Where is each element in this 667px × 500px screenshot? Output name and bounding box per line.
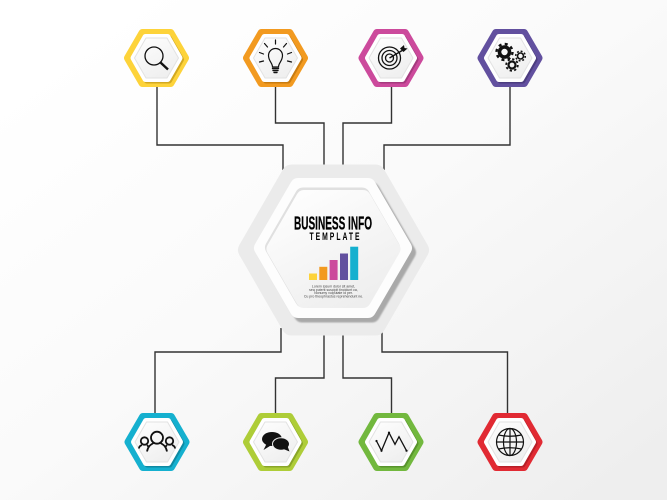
body text: Nonumy vulputate id per. (314, 291, 353, 295)
central hexagon panel (248, 174, 419, 326)
icon: magnifier (145, 47, 168, 70)
icon: people (139, 432, 175, 452)
bar chart (309, 247, 358, 280)
icon: target with arrow (378, 45, 408, 69)
body text: Cu pro theophrastus reprehendunt ne. (304, 294, 363, 298)
title: BUSINESS INFO (294, 214, 372, 234)
body text (304, 284, 363, 298)
node: settings (purple) (482, 33, 538, 83)
icon: gears (496, 44, 525, 71)
node: chat (lime) (247, 417, 304, 467)
icon: light bulb (260, 40, 292, 72)
node: team (blue) (128, 417, 186, 467)
node: trend (green) (362, 417, 420, 467)
icon: globe (496, 428, 524, 456)
node: target (pink) (362, 33, 420, 83)
icon: speech bubbles (262, 432, 290, 452)
icon: zigzag line (375, 432, 408, 452)
body text: Lorem ipsum dolor sit amet, (312, 284, 355, 288)
node: globe (red) (482, 417, 538, 467)
body text: sea putent suscipit tincidunt ca, (309, 288, 358, 292)
subtitle: TEMPLATE (309, 231, 362, 243)
node: idea (orange) (247, 33, 304, 83)
connector lines (155, 87, 510, 413)
node: search (yellow) (128, 33, 185, 83)
